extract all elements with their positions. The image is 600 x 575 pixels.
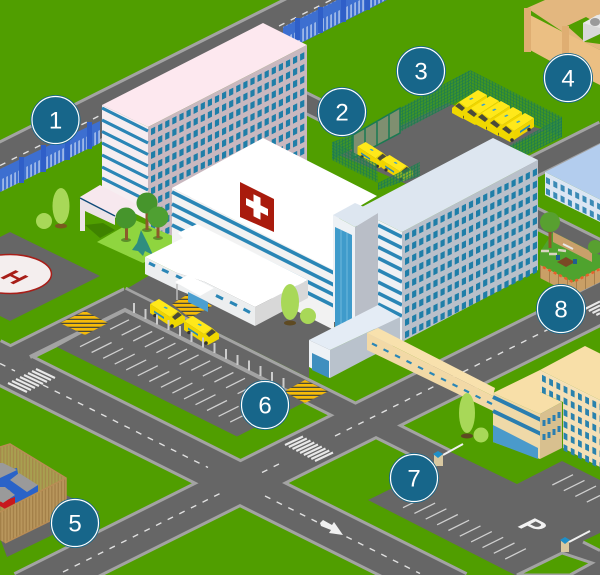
- light blue building: [545, 144, 600, 222]
- shrubs by canopy: [36, 188, 70, 229]
- connector wing: [309, 305, 400, 378]
- marker 3: [396, 46, 446, 96]
- stepping stone path: [541, 250, 566, 254]
- ambulance canopy: [175, 275, 214, 312]
- item 8 garden: [540, 212, 600, 295]
- parked ambulances row: [452, 90, 534, 142]
- marker 4: [543, 53, 593, 103]
- cage back and floor: [0, 444, 66, 512]
- main hospital block: [172, 138, 377, 330]
- marker 5: 5: [68, 510, 82, 538]
- garden tree left: [540, 212, 560, 248]
- marker 4: 4: [561, 66, 575, 92]
- light green courtyard lawn: [97, 220, 187, 263]
- tower with blue roof: [357, 138, 538, 342]
- forecourt in front of hospital: [128, 255, 340, 378]
- skybridge: [367, 328, 495, 411]
- marker 1: [30, 95, 80, 145]
- marker 2: [317, 87, 367, 137]
- marker 7: [389, 453, 439, 503]
- crosswalks: [8, 302, 600, 461]
- marker 7: 7: [407, 466, 421, 492]
- parking gate barrier 2: [560, 531, 590, 552]
- blue perimeter fence, left: [0, 121, 100, 192]
- entrance canopy: [80, 185, 138, 238]
- red cross flag: [240, 182, 274, 232]
- stacked containers: [0, 463, 38, 510]
- marker 3: 3: [414, 58, 428, 86]
- air conditioning unit: [583, 14, 600, 42]
- garden tree right: [588, 240, 600, 254]
- trees in courtyard: [116, 192, 168, 256]
- marker 1: 1: [49, 108, 62, 134]
- low emergency building: [145, 224, 308, 326]
- marker 6: 6: [258, 392, 272, 420]
- marker 8: 8: [554, 296, 568, 324]
- parking lot 7: [368, 450, 600, 575]
- marker 8: [536, 284, 586, 334]
- shrubs by low building: [281, 284, 316, 326]
- parking letter P: P: [511, 515, 555, 537]
- parking gate barrier 7: [433, 444, 463, 466]
- pine tree: [132, 230, 153, 256]
- item 5 storage cage: [0, 444, 100, 557]
- marker 5: [50, 498, 100, 548]
- ambulances at front of bay: [358, 142, 413, 181]
- glass stair column: [333, 203, 378, 330]
- building wing 1: pink roof tower: [102, 23, 307, 257]
- item 4 walled yard: [524, 0, 600, 85]
- hazard hatch pads: [60, 293, 328, 403]
- blue perimeter fence, right: [283, 0, 387, 52]
- beige clinic building: [493, 346, 600, 467]
- marker 6: [240, 380, 290, 430]
- picnic table: [556, 244, 577, 267]
- helipad: [0, 232, 100, 321]
- ambulances at entrance: [150, 299, 219, 345]
- bay gate: [353, 108, 400, 158]
- shrubs by clinic: [459, 393, 488, 442]
- bollards along lot 6: [134, 303, 284, 388]
- parking lot 6: [30, 310, 307, 436]
- marker 2: 2: [335, 100, 349, 126]
- road direction arrow: [320, 520, 343, 535]
- item 3 ambulance bay with fence: [332, 70, 562, 190]
- cage front wall: [0, 444, 66, 543]
